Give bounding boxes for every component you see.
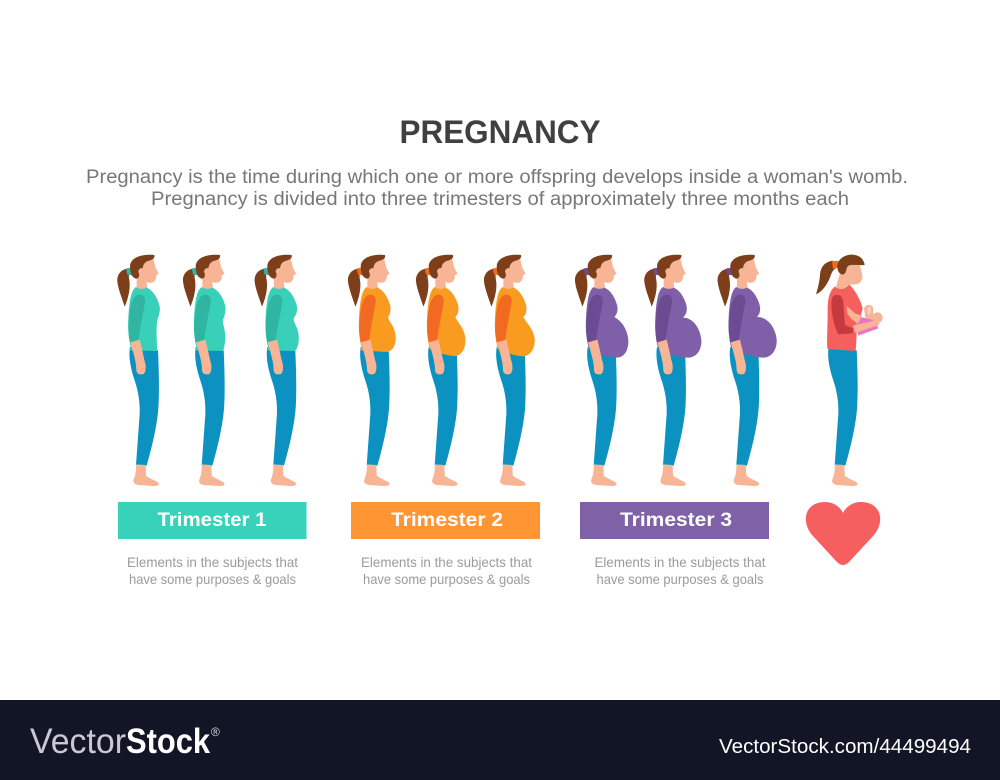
figure: trimester 3, middle <box>644 255 701 486</box>
footer logo <box>30 722 220 761</box>
mother sleeve <box>831 295 853 334</box>
figure: mother holding baby <box>816 255 883 486</box>
panel: trimester 1: Elements in the subjects that <box>127 554 298 570</box>
baby foot highlight <box>867 307 871 314</box>
icon: heart <box>806 502 880 565</box>
footer logo: Stock <box>126 722 210 761</box>
upper arm skin <box>847 306 862 324</box>
figure: trimester 2, middle <box>416 255 465 486</box>
figure: trimester 3, early <box>575 255 628 486</box>
mother shirt <box>827 284 863 351</box>
panel: trimester 2: Elements in the subjects that <box>361 554 532 570</box>
baby head <box>872 312 883 323</box>
footer image id: VectorStock.com/44499494 <box>719 736 971 758</box>
figure: trimester 2, early <box>348 255 396 486</box>
title: PREGNANCY <box>400 114 600 150</box>
baby blanket <box>855 317 878 336</box>
panel: trimester 2: Trimester 2 <box>391 510 503 531</box>
footer logo: Vector <box>30 722 126 761</box>
panel: trimester 3: Elements in the subjects that <box>594 554 766 570</box>
panel: trimester 1: Trimester 1 <box>158 510 267 531</box>
figure: trimester 1, middle <box>183 255 226 486</box>
footer bar <box>0 700 1000 780</box>
panel: trimester 3: Trimester 3 <box>620 510 732 531</box>
panel: trimester 3 <box>580 502 769 587</box>
intro text: Pregnancy is divided into three trimesters of approximately three months each <box>151 189 849 210</box>
intro text <box>86 167 908 210</box>
panel: trimester 2 <box>351 502 540 587</box>
panel: trimester 1: have some purposes & goals <box>129 571 296 587</box>
figure: trimester 3, late <box>718 255 777 486</box>
panel: trimester 2: have some purposes & goals <box>363 571 530 587</box>
panel: trimester 3: have some purposes & goals <box>596 571 764 587</box>
baby leg <box>864 305 873 319</box>
mother hand <box>853 320 880 333</box>
intro text: Pregnancy is the time during which one or more offspring develops inside a woman's womb. <box>86 167 908 188</box>
figure: trimester 1, early <box>117 255 160 486</box>
figure: trimester 1, late <box>255 255 299 486</box>
panel: trimester 1 <box>118 502 306 587</box>
footer logo: ® <box>211 725 220 739</box>
figure: trimester 2, late <box>484 255 535 486</box>
